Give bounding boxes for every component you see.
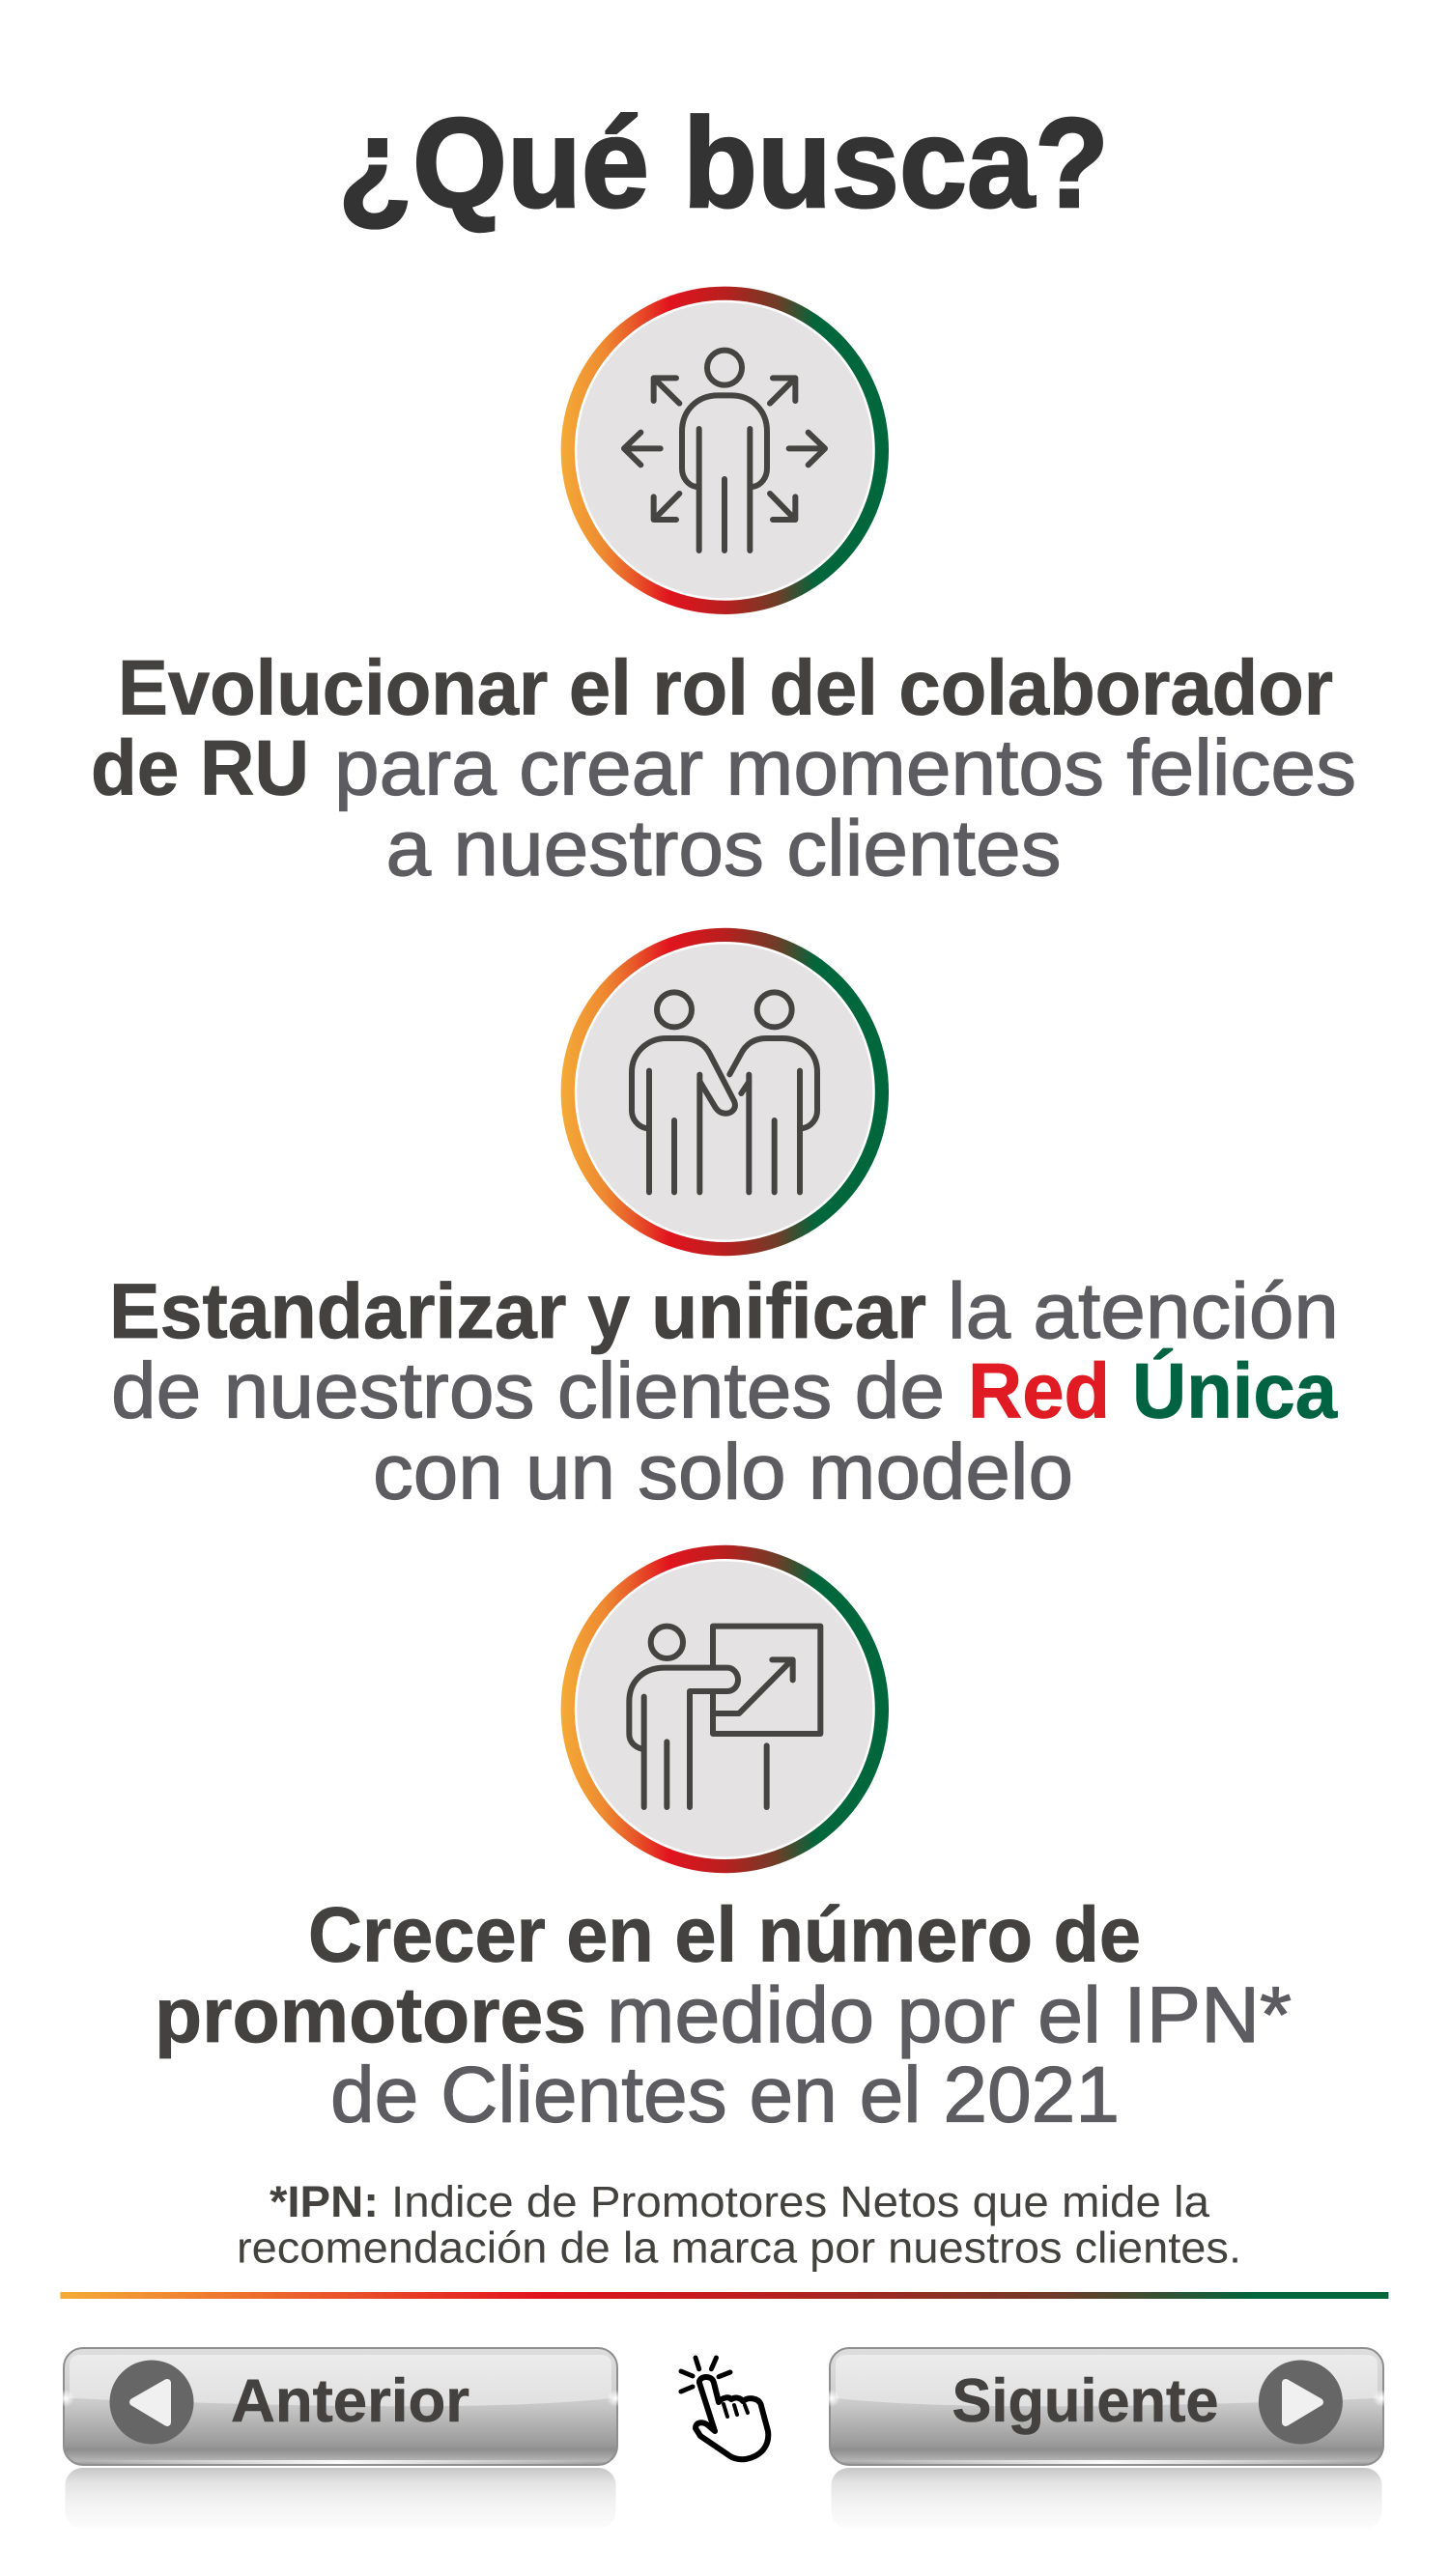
- text block: crecer en promotores: Crecer en el número de: [308, 1892, 1141, 1979]
- text block: evolucionar el rol: de RU: [91, 724, 309, 811]
- text block: crecer en promotores: medido por el IPN*: [607, 1971, 1292, 2059]
- footnote: IPN definition: *IPN:: [270, 2177, 379, 2226]
- icon: two people shaking hands in gradient ring: [561, 928, 889, 1256]
- text block: estandarizar y unificar: Única: [1132, 1347, 1338, 1435]
- icon: pointing hand click: [681, 2358, 768, 2459]
- button: Siguiente: Siguiente: [952, 2367, 1219, 2435]
- icon: person with arrows in gradient ring: [561, 287, 889, 614]
- icon: presenter with growth chart in gradient ring: [561, 1545, 889, 1873]
- text block: crecer en promotores: promotores: [155, 1972, 586, 2059]
- text block: estandarizar y unificar: con un solo modelo: [373, 1429, 1073, 1516]
- text block: estandarizar y unificar: [109, 1267, 1339, 1516]
- button: Anterior: [57, 2348, 624, 2529]
- footnote: IPN definition: [237, 2177, 1241, 2273]
- text block: evolucionar el rol: Evolucionar el rol del colaborador: [118, 644, 1333, 731]
- button: Siguiente: [823, 2348, 1390, 2529]
- text block: estandarizar y unificar: de nuestros clientes de: [111, 1347, 945, 1435]
- footnote: IPN definition: Indice de Promotores Netos que mide la: [391, 2177, 1210, 2226]
- text block: estandarizar y unificar: Estandarizar y unificar: [109, 1268, 926, 1355]
- footnote: IPN definition: recomendación de la marca por nuestros clientes.: [237, 2223, 1241, 2273]
- text block: evolucionar el rol: [91, 644, 1356, 892]
- text block: crecer en promotores: [155, 1892, 1292, 2139]
- text block: crecer en promotores: de Clientes en el 2021: [330, 2052, 1120, 2139]
- text block: evolucionar el rol: a nuestros clientes: [386, 805, 1061, 892]
- gradient divider rule: [60, 2292, 1388, 2299]
- text block: estandarizar y unificar: la atención: [948, 1267, 1339, 1355]
- title: ¿Qué busca?: [338, 92, 1109, 234]
- text block: evolucionar el rol: para crear momentos felices: [334, 723, 1356, 811]
- button: Anterior: Anterior: [231, 2367, 469, 2435]
- text block: estandarizar y unificar: Red: [968, 1348, 1110, 1435]
